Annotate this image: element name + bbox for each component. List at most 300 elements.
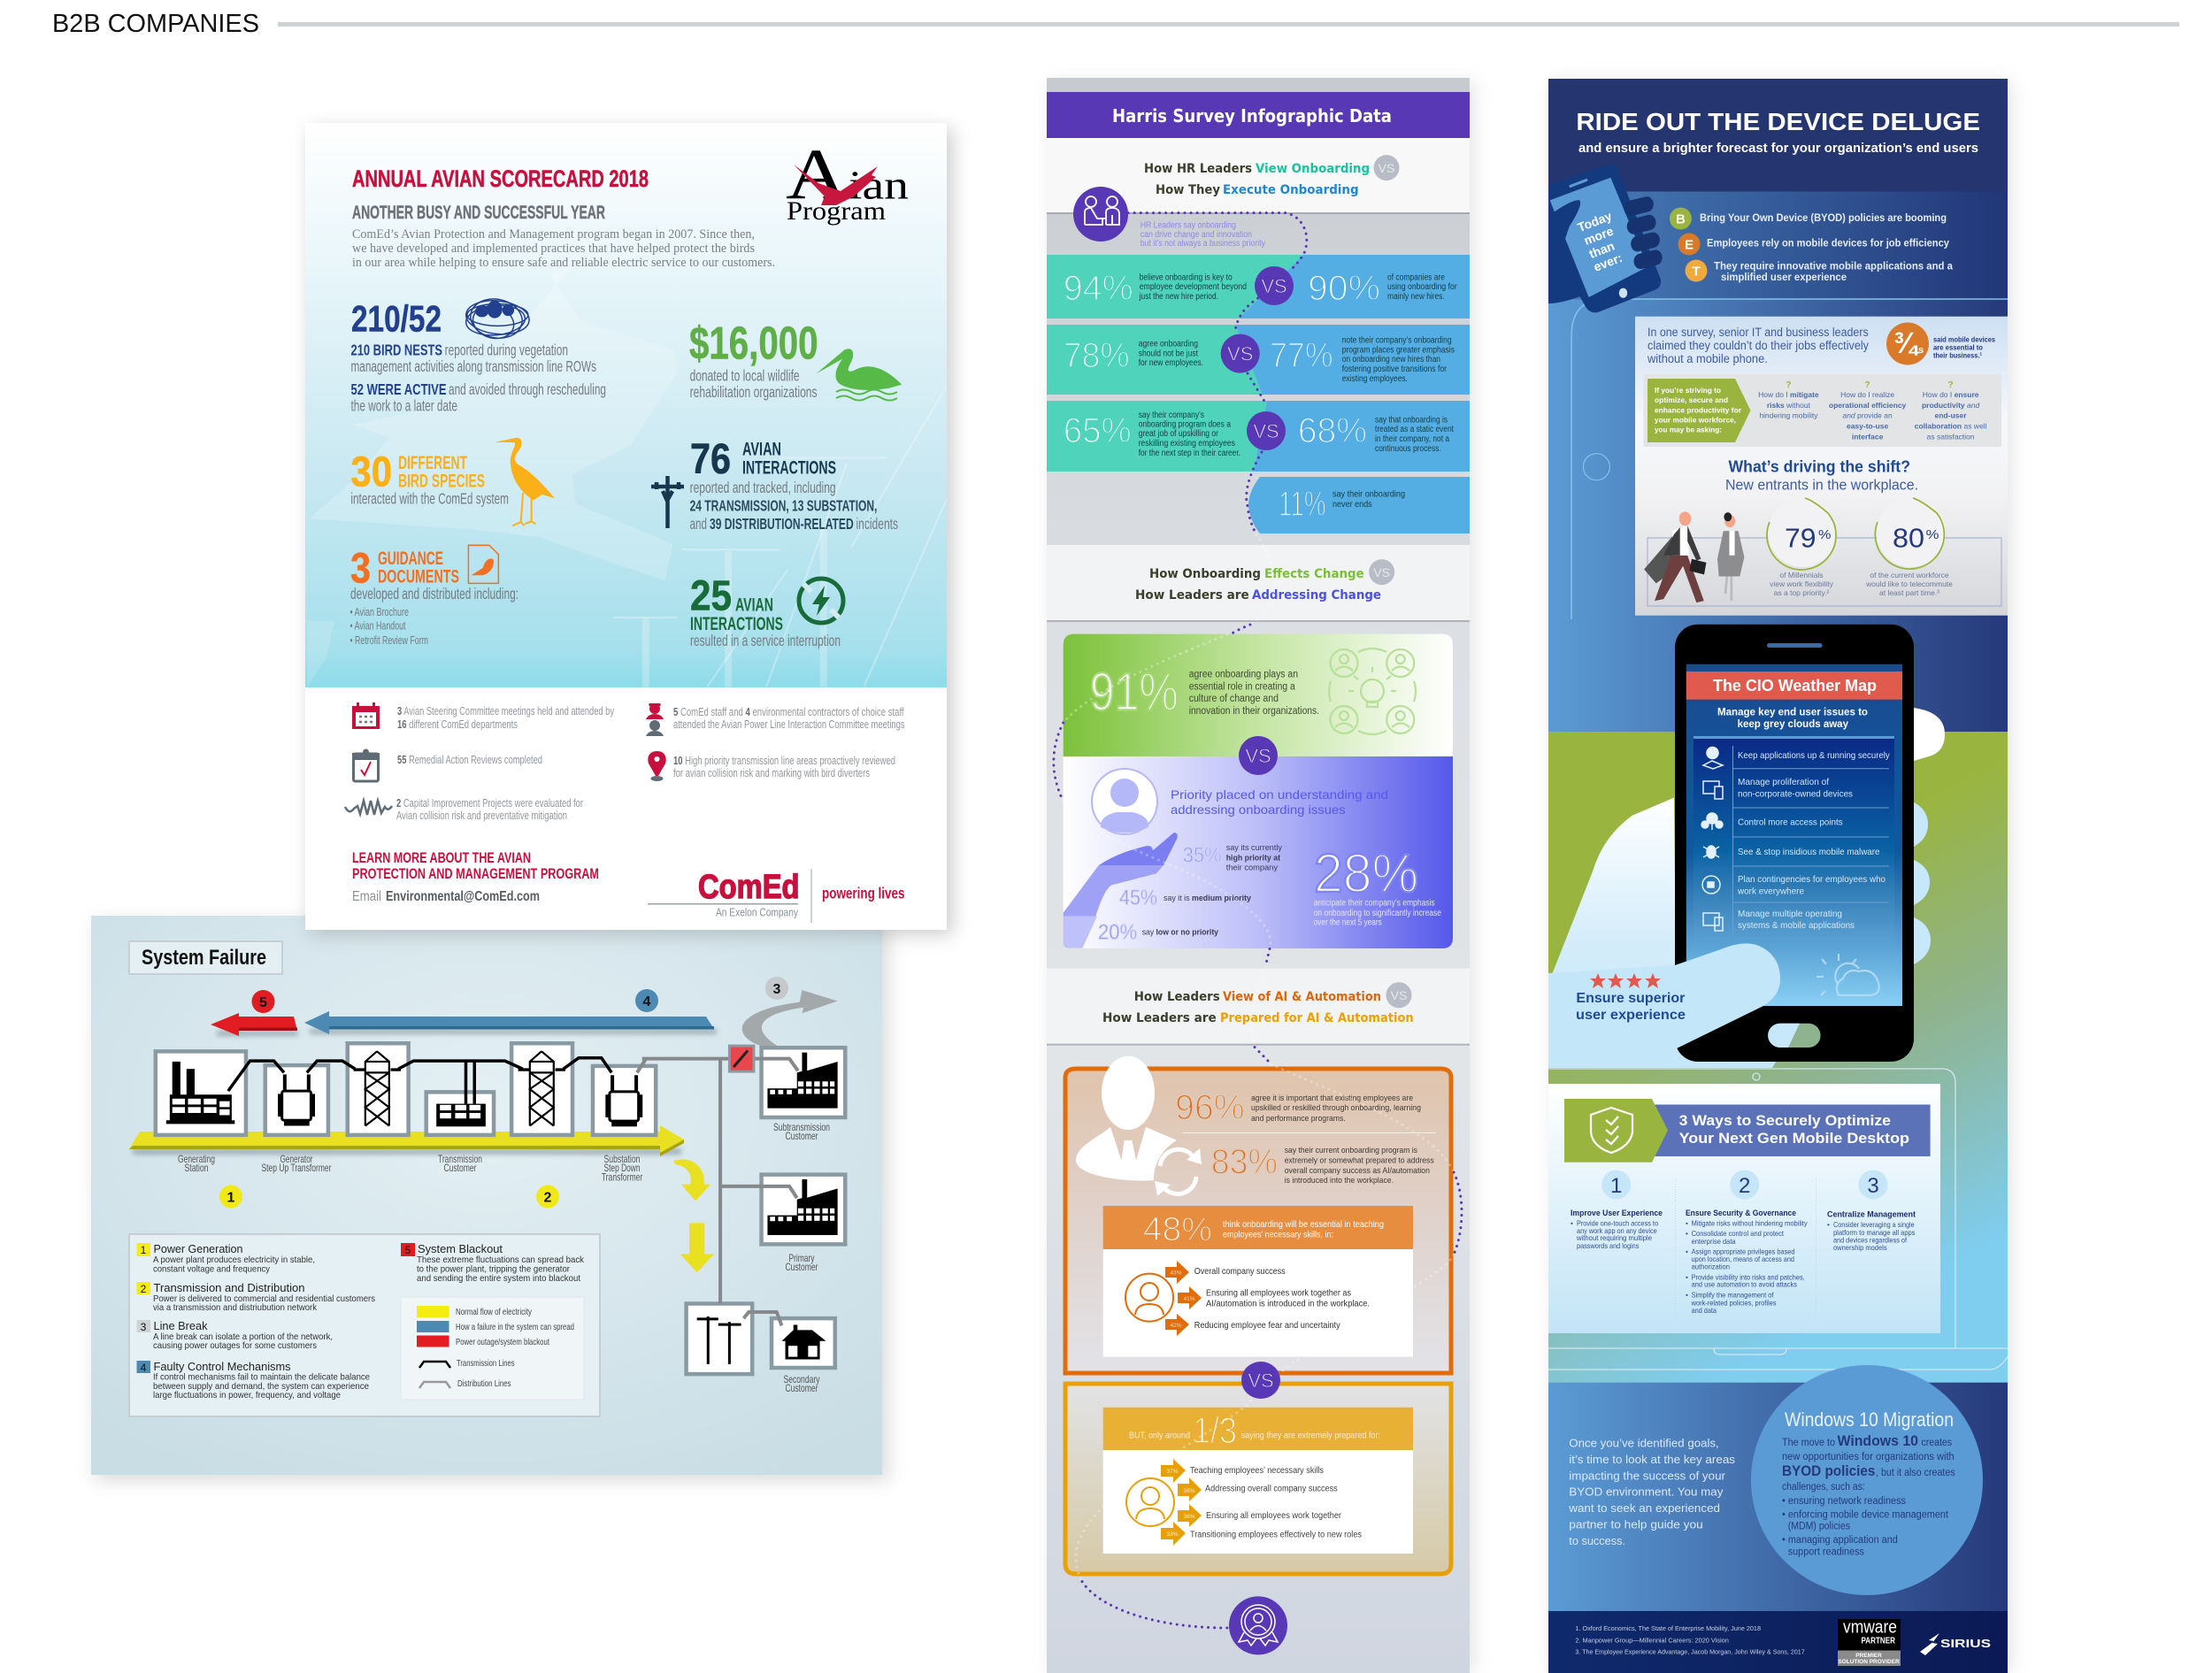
stat: 30 bird species: DIFFERENT (398, 453, 467, 473)
card: 3 ways to optimize: Mitigate risks without hindering mobility (1692, 1219, 1809, 1228)
yellow sub-panel: one third: 1/3 (1193, 1409, 1237, 1451)
list of end user issues: Manage proliferation of (1738, 777, 1829, 787)
yellow sub-panel: one third: 33% (1166, 1531, 1179, 1538)
section header: effects vs addressing change: Addressing Change (1252, 588, 1381, 602)
caption: HR leaders: but it’s not always a business priority (1141, 239, 1265, 249)
strip: questions: How do I mitigate (1758, 390, 1819, 399)
VS badges: VS (1261, 275, 1287, 297)
circle: Windows 10 Migration: (MDM) policies (1788, 1521, 1850, 1531)
list of end user issues: work everywhere (1737, 886, 1804, 897)
closing paragraph: want to seek an experienced (1568, 1501, 1720, 1515)
BET list (1670, 207, 1954, 283)
heading box: System Failure (129, 941, 282, 974)
stat: 76 avian interactions: incidents (856, 515, 898, 533)
step badges: 2 (544, 1191, 552, 1205)
diagram labels: Generator (280, 1153, 313, 1165)
logo: ComEd: An Exelon Company (716, 906, 798, 919)
list of end user issues: systems & mobile applications (1738, 920, 1855, 931)
big percentages: 77% (1270, 336, 1333, 375)
blue failure arrow (304, 1011, 714, 1034)
strip: questions: operational efficiency (1829, 401, 1907, 410)
legend panel: Transmission and Distribution (154, 1281, 304, 1294)
closing paragraph: BYOD environment. You may (1569, 1485, 1724, 1499)
legend panel: A power plant produces electricity in stable, (153, 1255, 315, 1265)
card: 3 ways to optimize: without requiring multiple (1576, 1234, 1652, 1242)
list icons (1701, 747, 1723, 931)
yellow sub-panel: one third: saying they are extremely prepared for: (1241, 1431, 1380, 1441)
section header: effects vs addressing change: How Onboarding (1149, 567, 1261, 581)
circle: Windows 10 Migration: Windows 10 Migration (1785, 1408, 1954, 1431)
circle: Windows 10 Migration: • ensuring network readiness (1782, 1496, 1906, 1507)
panel: Harris Survey onboarding infographic (1047, 78, 1474, 1673)
phone: CIO Weather Map: The CIO Weather Map (1713, 677, 1877, 695)
caption: HR leaders: HR Leaders say onboarding (1141, 221, 1236, 231)
section header: view vs execute onboarding: How They (1156, 183, 1220, 197)
section header: view vs execute onboarding: How HR Leaders (1144, 162, 1252, 176)
BET list: E (1685, 237, 1694, 253)
card: 3 ways to optimize: and use automation to avoid attacks (1692, 1281, 1797, 1289)
big percentages: 11% (1279, 485, 1326, 524)
logo: ComEd: powering lives (822, 885, 905, 902)
banner (1564, 1099, 1931, 1163)
orange sub-panel: 48%: Overall company success (1194, 1267, 1286, 1277)
background bird and power-pole watermark (307, 165, 946, 687)
icon: hand holding tilted phone: than (1587, 239, 1617, 261)
home button (1768, 1024, 1821, 1048)
icon: heron (495, 438, 555, 526)
orange frame: AI view: extremely or somewhat prepared to address (1285, 1156, 1434, 1166)
stats frame with 79% and 80%: would like to telecommute (1865, 579, 1953, 588)
legend panel: 5 (405, 1244, 411, 1256)
card: 3 ways to optimize: Assign appropriate privileges based (1692, 1247, 1795, 1255)
diagram labels: Customer (786, 1261, 818, 1273)
section header: view vs execute onboarding: VS (1379, 161, 1394, 175)
row descriptions: reskilling existing employees (1139, 439, 1235, 449)
card: 3 ways to optimize: 1 (1610, 1174, 1622, 1198)
orange frame: AI view (1065, 1056, 1451, 1373)
strip: questions: and provide an (1842, 411, 1893, 420)
teal and blue comparison rows (1047, 255, 1470, 533)
card: 3 ways to optimize: Centralize Management (1827, 1209, 1916, 1219)
legend panel: Power Generation (154, 1242, 242, 1255)
diagram labels: Customer (786, 1382, 818, 1394)
big percentages: 78% (1064, 336, 1130, 375)
caption: HR leaders: can drive change and innovation (1141, 230, 1252, 240)
logo: VMware partner: SOLUTION PROVIDER (1838, 1659, 1900, 1665)
closing paragraph: partner to help guide you (1569, 1518, 1703, 1531)
callout: three quarters: s (1918, 345, 1924, 356)
green card: 91%: agree onboarding plays an (1189, 669, 1298, 679)
factories (767, 1053, 838, 1235)
purple card: priority and 28%: over the next 5 years (1314, 918, 1382, 927)
tablet outline (1571, 299, 2008, 619)
green card: 91%: innovation in their organizations. (1189, 706, 1319, 717)
footnotes (1575, 1624, 1805, 1656)
icon: spring resistor wave (345, 801, 392, 815)
arrow shadows (133, 1029, 717, 1155)
list of end user issues: Control more access points (1738, 817, 1843, 828)
legend panel: If control mechanisms fail to maintain the delicate balance (153, 1371, 370, 1382)
dotted journey line (1052, 213, 1462, 1628)
section header: view vs execute onboarding (1047, 138, 1470, 214)
orange frame: AI view: 83% (1211, 1143, 1278, 1182)
stats frame with 79% and 80%: 79 (1785, 523, 1816, 554)
priority levels: 35% (1183, 844, 1222, 867)
rating callout (1576, 973, 1686, 1023)
call to action: Email (352, 889, 381, 904)
diagram labels: Subtransmission (773, 1121, 830, 1133)
logo: VMware partner: vmware (1843, 1618, 1897, 1638)
facts list: 55 Remedial Action Reviews completed (397, 753, 542, 766)
yellow sub-panel: one third: 36% (1183, 1488, 1195, 1494)
BET list: simplified user experience (1721, 272, 1847, 283)
circle: Windows 10 Migration: creates (1922, 1438, 1952, 1448)
circle: Windows 10 Migration: BYOD policies (1782, 1462, 1875, 1479)
orange sub-panel: 48%: employees’ necessary skills, in: (1223, 1230, 1333, 1240)
thumb (1548, 943, 1780, 1068)
icon: staff people (646, 703, 664, 736)
list of end user issues: Plan contingencies for employees who (1738, 874, 1886, 885)
strip: questions: If you’re striving to (1655, 386, 1721, 395)
purple card: priority and 28%: say low or no priority (1142, 928, 1219, 938)
list of end user issues: See & stop insidious mobile malware (1738, 847, 1880, 857)
logo: Sirius: SIRIUS (1940, 1637, 1991, 1650)
title: RIDE OUT THE DEVICE DELUGE (1576, 108, 1980, 135)
stat: 210/52 bird nests: 210/52 (351, 297, 442, 340)
strip: questions: How do I ensure (1923, 390, 1979, 399)
title: ANNUAL AVIAN SCORECARD 2018 (352, 165, 649, 192)
diagram labels: Customer (786, 1130, 818, 1142)
icon: hand holding tilted phone: ever: (1592, 250, 1624, 274)
callout: three quarters (1886, 322, 1995, 365)
logo: Avian Program: Program (787, 196, 886, 226)
legend panel: 1 (141, 1244, 147, 1256)
logo: Sirius (1920, 1633, 1991, 1655)
stat: $16,000 donated: donated to local wildlife (690, 366, 800, 384)
icon: businessman silhouette (1076, 1056, 1177, 1181)
orange frame: AI view: say their current onboarding program is (1285, 1146, 1417, 1155)
stat: 3 guidance documents: DOCUMENTS (378, 566, 459, 587)
stat: 3 guidance documents: • Retrofit Review Form (350, 634, 428, 647)
stat: 76 avian interactions: INTERACTIONS (742, 457, 836, 478)
strip: questions: optimize, secure and (1655, 395, 1728, 404)
closing paragraph: it’s time to look at the key areas (1569, 1453, 1736, 1466)
light hand behind phone (1548, 708, 1945, 1068)
circle: Windows 10 Migration: challenges, such as: (1782, 1482, 1865, 1493)
utility poles and house (697, 1316, 741, 1364)
strip: questions: hindering mobility (1759, 411, 1818, 420)
legend panel: Line Break (154, 1319, 208, 1332)
stat: 210/52 bird nests: 52 WERE ACTIVE (350, 380, 446, 398)
row descriptions: note their company’s onboarding (1342, 336, 1452, 346)
row descriptions: just the new hire period. (1139, 292, 1218, 302)
logo: ComEd: ComEd (698, 869, 800, 906)
row descriptions: of companies are (1387, 273, 1445, 283)
phone: CIO Weather Map: keep grey clouds away (1738, 718, 1848, 730)
purple card: priority and 28%: on onboarding to significantly increase (1314, 909, 1441, 918)
stats frame with 79% and 80%: 80 (1893, 523, 1924, 554)
icon: calendar (352, 702, 380, 729)
row descriptions: using onboarding for (1387, 282, 1457, 292)
rating callout: user experience (1576, 1008, 1686, 1023)
facts list: 2 Capital Improvement Projects were evaluated for (396, 796, 583, 810)
heading: what's driving the shift (1725, 458, 1918, 493)
VS badges: VS (1253, 420, 1279, 442)
stat: 210/52 bird nests (350, 293, 606, 414)
row descriptions: on onboarding new hires than (1342, 355, 1440, 365)
diagram labels: Step Down (603, 1162, 641, 1174)
green card: 91%: essential role in creating a (1189, 681, 1295, 692)
list of end user issues: Keep applications up & running securely (1738, 750, 1890, 761)
row descriptions: onboarding program does a (1139, 420, 1231, 430)
card: survey and shift: claimed they couldn’t do their jobs effectively (1647, 339, 1869, 352)
transformers (278, 1074, 642, 1126)
big percentages: 94% (1064, 269, 1133, 308)
VS badges (1221, 266, 1294, 1399)
circle: Windows 10 Migration: Windows 10 (1837, 1432, 1918, 1449)
VS badges: VS (1245, 745, 1271, 767)
strip: questions: ? (1948, 380, 1954, 390)
icon: hand holding tilted phone: Today (1576, 209, 1614, 234)
purple card: priority and 28%: Priority placed on understanding and (1171, 787, 1388, 802)
facts list: attended the Avian Power Line Interaction Committee meetings (673, 718, 905, 731)
list of end user issues (1694, 739, 1894, 940)
phone: CIO Weather Map (1548, 625, 1914, 1068)
step badges: 4 (643, 994, 651, 1009)
row descriptions: fostering positive transitions for (1342, 365, 1448, 374)
yellow sub-panel: one third: Transitioning employees effectively to new roles (1190, 1531, 1362, 1540)
diagram labels: Station (184, 1162, 209, 1174)
stat: 210/52 bird nests: and avoided through rescheduling (449, 380, 606, 398)
facts list: for avian collision risk and marking with bird diverters (673, 766, 870, 779)
icon: team around lightbulb (1329, 648, 1416, 734)
card: survey and shift: In one survey, senior IT and business leaders (1647, 326, 1869, 339)
green card: 91%: culture of change and (1189, 694, 1279, 704)
card: 3 ways to optimize: any work app on any device (1577, 1227, 1657, 1235)
strip: questions: enhance productivity for (1655, 405, 1742, 414)
card: 3 ways to optimize: • (1686, 1219, 1688, 1228)
big percentages (1064, 269, 1380, 524)
priority levels: 45% (1119, 886, 1157, 910)
red blackout arrow (211, 1013, 297, 1036)
row descriptions: agree onboarding (1139, 340, 1198, 349)
card: 3 ways to optimize (1548, 1084, 1940, 1333)
section header: AI view vs preparedness (1047, 969, 1470, 1046)
diagram labels: Secondary (784, 1373, 819, 1385)
towers (365, 1051, 554, 1125)
stats frame with 79% and 80%: at least part time.³ (1879, 588, 1939, 597)
icon: hand holding tilted phone (1548, 164, 1663, 312)
strip: questions: collaboration as well (1915, 422, 1987, 431)
intro paragraph: in our area while helping to ensure safe and reliable electric service to our customers. (352, 256, 775, 270)
banner: 3 Ways to Securely Optimize (1679, 1112, 1891, 1129)
BET list: T (1692, 264, 1701, 280)
header: Harris Survey Infographic Data (1047, 92, 1470, 138)
colour key: Distribution Lines (457, 1378, 511, 1389)
VS badges: VS (1248, 1370, 1274, 1392)
card: 3 ways to optimize: upon location, means of access and (1692, 1255, 1794, 1263)
orange sub-panel: 48%: 43% (1170, 1270, 1182, 1276)
yellow sub-panel: one third (1103, 1408, 1413, 1554)
heading: what's driving the shift: New entrants in the workplace. (1725, 476, 1918, 493)
diagram labels (178, 1121, 830, 1394)
legend panel: large fluctuations in power, frequency, and voltage (153, 1390, 341, 1401)
green card: 91%: 91% (1090, 662, 1179, 721)
icon: clipboard (352, 748, 380, 781)
logo: Avian Program: A (786, 134, 848, 214)
stat: 76 avian interactions: and (690, 515, 707, 533)
header: Harris Survey Infographic Data: Harris Survey Infographic Data (1112, 105, 1392, 127)
row descriptions: for new employees. (1139, 358, 1203, 368)
row descriptions: mainly new hires. (1387, 292, 1445, 302)
diagram labels: Customer (444, 1162, 477, 1174)
legend panel: Power is delivered to commercial and residential customers (153, 1293, 375, 1304)
strip: questions: ? (1865, 380, 1870, 390)
strip: questions: risks without (1767, 401, 1811, 410)
circle: Windows 10 Migration: • managing application and (1782, 1535, 1898, 1546)
card: 3 ways to optimize: 2 (1739, 1174, 1750, 1198)
callout: three quarters: are essential to (1933, 343, 1983, 352)
yellow sub-panel: one third: Ensuring all employees work together (1206, 1511, 1342, 1521)
stat: 3 guidance documents: • Avian Handout (350, 619, 406, 632)
stat: 25 avian interactions: AVIAN (735, 595, 773, 615)
big percentages: 90% (1308, 269, 1380, 308)
orange sub-panel: 48%: AI/automation is introduced in the workplace. (1206, 1299, 1370, 1309)
colour key: Normal flow of electricity (456, 1307, 533, 1317)
yellow frame: prepared (1065, 1384, 1451, 1574)
purple card: priority and 28%: high priority at (1226, 854, 1281, 863)
stat: $16,000 donated: rehabilitation organizations (690, 383, 818, 401)
orange frame: AI view: 96% (1175, 1088, 1245, 1127)
orange sub-panel: 48% (1103, 1206, 1413, 1357)
section header: view vs execute onboarding: Execute Onboarding (1223, 183, 1359, 197)
section header: AI view vs preparedness: How Leaders (1134, 990, 1220, 1004)
icon: open hand (1064, 833, 1178, 948)
step badges (219, 977, 788, 1209)
colour key: How a failure in the system can spread (456, 1322, 574, 1332)
caption: HR leaders (1141, 221, 1265, 249)
section header: effects vs addressing change: How Leaders are (1135, 588, 1249, 602)
card: 3 ways to optimize: Consolidate control and protect (1692, 1230, 1785, 1238)
strip: questions (1644, 374, 2001, 447)
row descriptions: should not be just (1139, 349, 1198, 358)
legend panel: System Blackout (418, 1242, 503, 1255)
card: 3 ways to optimize: Provide visibility into risks and patches, (1692, 1273, 1805, 1281)
section header: effects vs addressing change: Effects Change (1264, 567, 1364, 581)
orange sub-panel: 48%: Ensuring all employees work together as (1206, 1289, 1351, 1299)
yellow sub-panel: one third: BUT, only around (1129, 1431, 1190, 1441)
card: 3 ways to optimize: • (1571, 1219, 1573, 1228)
icon: person in circle (1092, 769, 1157, 834)
card: 3 ways to optimize: Simplify the management of (1692, 1292, 1774, 1300)
icon: location pin (648, 751, 666, 781)
legend panel: 3 (141, 1321, 147, 1333)
stat: 3 guidance documents (350, 545, 518, 647)
row descriptions: say their onboarding (1333, 489, 1405, 500)
stat: $16,000 donated (689, 318, 902, 401)
legend panel: 2 (141, 1283, 147, 1295)
call to action: LEARN MORE ABOUT THE AVIAN (352, 850, 531, 866)
logo: Avian Program (786, 134, 909, 226)
icon: utility pole (651, 476, 684, 528)
stat: 210/52 bird nests: reported during vegetation (445, 342, 568, 359)
orange sub-panel: 48%: 48% (1143, 1211, 1212, 1248)
diagram labels: Transformer (602, 1171, 642, 1184)
diagram: power network drawing (156, 990, 845, 1374)
stat: 30 bird species: BIRD SPECIES (398, 472, 485, 492)
footnotes: 3. The Employee Experience Advantage, Jacob Morgan, John Wiley & Sons, 2017 (1575, 1647, 1805, 1656)
rating callout: Ensure superior (1576, 991, 1685, 1006)
diagram labels: Generating (178, 1153, 215, 1165)
legend panel: 4 (141, 1362, 147, 1374)
row descriptions: great job of upskilling or (1139, 429, 1219, 439)
colour key: Transmission Lines (457, 1358, 515, 1369)
stat: 25 avian interactions: resulted in a service interruption (690, 632, 841, 649)
big percentages: 68% (1298, 411, 1367, 450)
legend panel: and sending the entire system into blackout (417, 1273, 580, 1284)
orange frame: AI view: upskilled or reskilled through onboarding, learning (1251, 1103, 1421, 1113)
purple card: priority and 28%: anticipate their company’s emphasis (1314, 899, 1435, 909)
icon: award badge (1229, 1596, 1287, 1654)
section header: view vs execute onboarding: View Onboarding (1256, 162, 1370, 176)
heading box: System Failure: System Failure (142, 946, 266, 970)
row descriptions: never ends (1333, 499, 1372, 510)
legend panel: between supply and demand, the system can experience (153, 1381, 369, 1392)
title: and ensure a brighter forecast for your organization’s end users (1578, 141, 1978, 156)
strip: questions: end-user (1935, 411, 1967, 420)
row descriptions: say their company’s (1139, 411, 1204, 420)
section header: AI view vs preparedness: View of AI & Automation (1223, 990, 1381, 1004)
stat: 25 avian interactions: 25 (690, 573, 732, 620)
laptop outline (1548, 1069, 2008, 1370)
call to action: PROTECTION AND MANAGEMENT PROGRAM (352, 866, 599, 882)
purple card: priority and 28% (1064, 756, 1453, 948)
section header: AI view vs preparedness: VS (1391, 988, 1407, 1002)
stat: 25 avian interactions (690, 573, 843, 649)
strip: questions: as satisfaction (1927, 432, 1975, 441)
logo: VMware partner (1838, 1618, 1901, 1666)
strip: questions: productivity and (1922, 401, 1979, 410)
call to action (352, 850, 599, 904)
row descriptions: for the next step in their career. (1139, 449, 1240, 458)
closing paragraph: to success. (1569, 1534, 1625, 1547)
heading: what's driving the shift: What’s driving the shift? (1729, 458, 1910, 476)
card: 3 ways to optimize: work-related policies, profiles (1691, 1299, 1777, 1307)
icon: nest (464, 293, 532, 345)
card: 3 ways to optimize: • (1686, 1292, 1688, 1300)
card: 3 ways to optimize: • (1686, 1273, 1688, 1281)
legend panel: to the power plant, tripping the generator (417, 1263, 570, 1274)
facts list (396, 704, 905, 822)
stat: 76 avian interactions: 24 TRANSMISSION, 13 SUBSTATION, (690, 497, 877, 515)
footnotes: 1. Oxford Economics, The State of Enterprise Mobility, June 2018 (1575, 1624, 1761, 1632)
row descriptions (1139, 273, 1457, 510)
card: 3 ways to optimize: ownership models (1833, 1244, 1887, 1252)
circle: Windows 10 Migration: support readiness (1788, 1546, 1864, 1557)
subtitle: ANOTHER BUSY AND SUCCESSFUL YEAR (352, 203, 605, 223)
row descriptions: in their company, not a (1375, 434, 1449, 444)
section header: effects vs addressing change (1047, 545, 1470, 622)
legend panel: via a transmission and distriubution network (153, 1302, 318, 1313)
orange frame: AI view: and performance programs. (1251, 1114, 1346, 1124)
stat: 30 bird species: 30 (350, 449, 392, 495)
yellow sub-panel: one third: Teaching employees’ necessary skills (1190, 1466, 1324, 1476)
card: 3 ways to optimize: Provide one-touch access to (1577, 1219, 1658, 1228)
section header: effects vs addressing change: VS (1373, 565, 1390, 579)
facts list: 10 High priority transmission line areas proactively reviewed (673, 754, 895, 767)
section heading: B2B Companies: B2B COMPANIES (52, 10, 259, 38)
yellow sub-panel: one third: 36% (1183, 1514, 1195, 1520)
